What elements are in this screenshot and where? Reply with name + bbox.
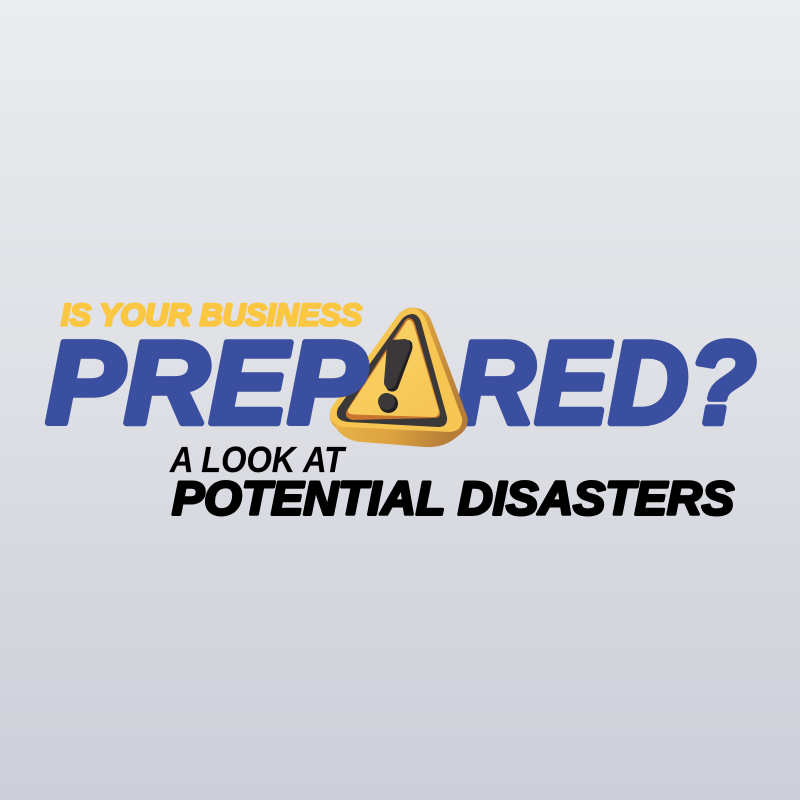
triangle front rim bbox=[330, 308, 462, 432]
orange inner edge bbox=[346, 318, 440, 420]
exclamation mark bbox=[378, 339, 412, 413]
heading word end: red?: RED? bbox=[455, 317, 756, 448]
dark inset ring bbox=[337, 314, 447, 427]
heading word start: prep: PREP bbox=[46, 317, 367, 448]
triangle yellow face bbox=[348, 320, 439, 417]
icon: warning triangle standing in for the letter A bbox=[330, 308, 468, 447]
subheading: potential disasters: POTENTIAL DISASTERS bbox=[172, 472, 734, 524]
subheading: a look at: A LOOK AT bbox=[169, 439, 347, 480]
triangle body bbox=[330, 308, 468, 447]
exclamation bar bbox=[386, 340, 412, 392]
heading line: is your business: IS YOUR BUSINESS bbox=[61, 296, 362, 332]
exclamation dot bbox=[379, 394, 398, 413]
